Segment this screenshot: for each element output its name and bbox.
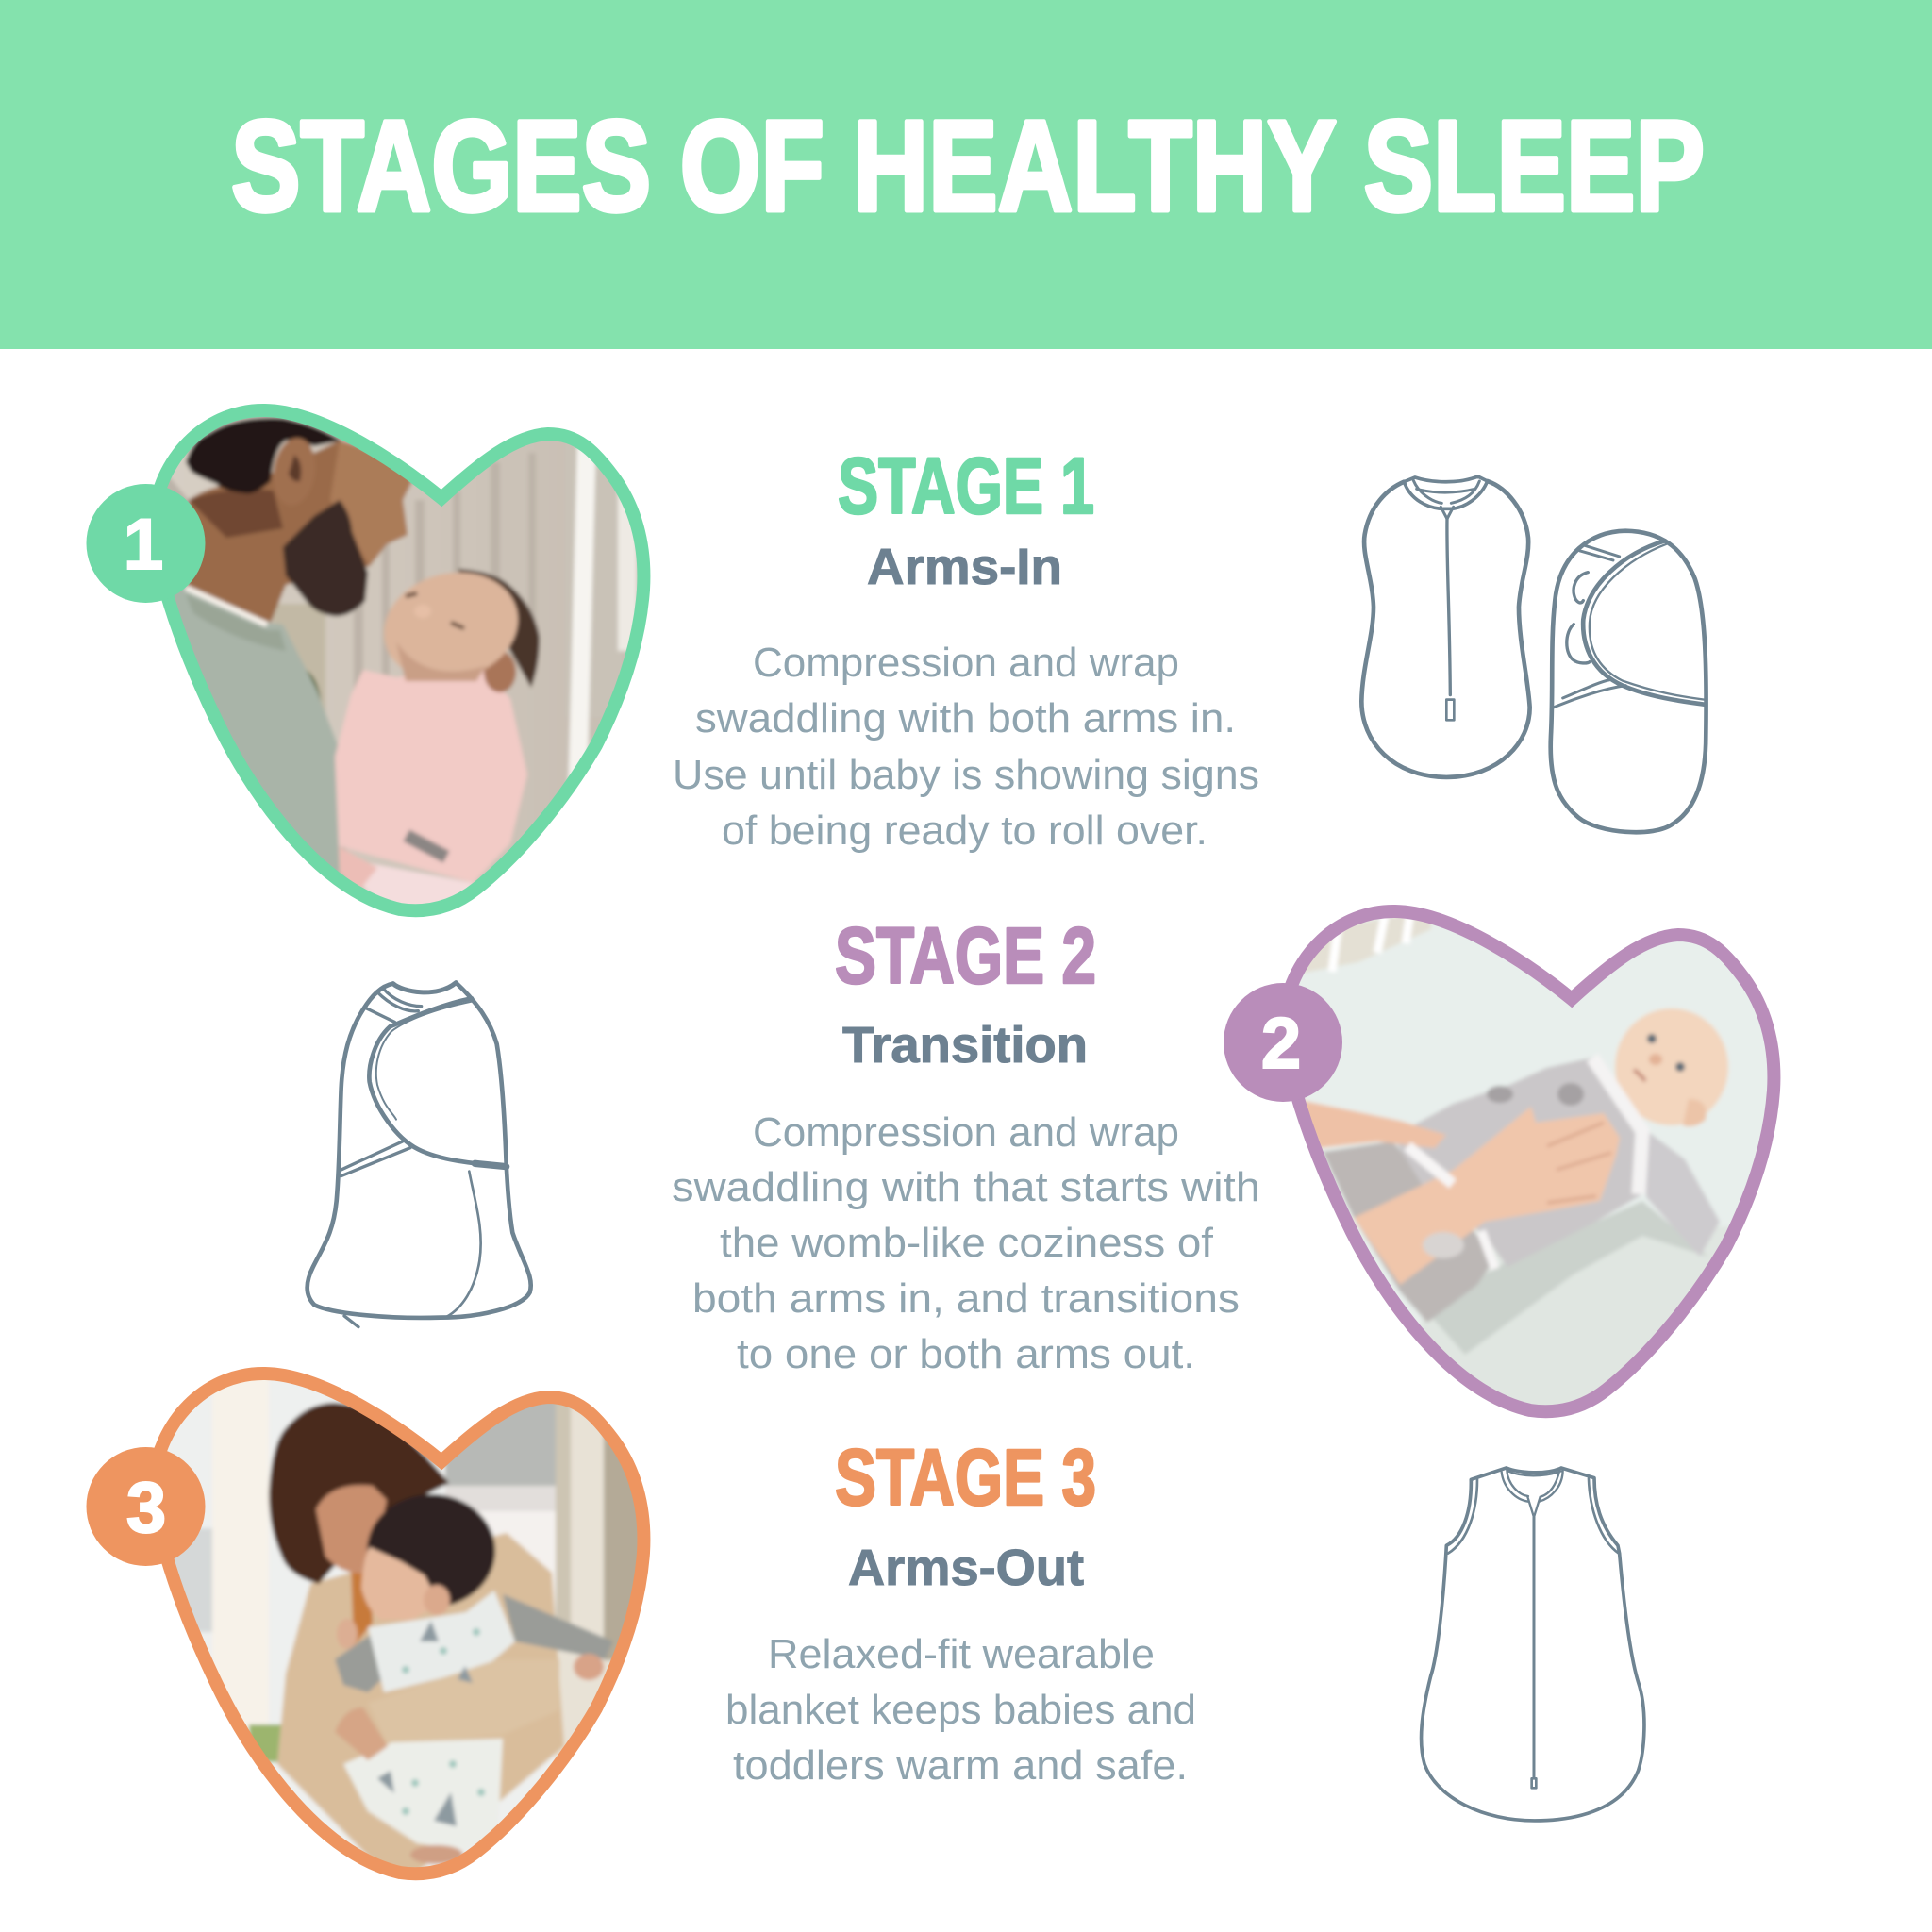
badge 2: [1224, 983, 1342, 1102]
stage 2 description: [672, 1109, 1260, 1377]
stage 2 description: both arms in, and transitions: [692, 1275, 1240, 1322]
icon: wrap swaddle pod: [1551, 531, 1707, 832]
stage 2 subheading: Transition: [842, 1017, 1088, 1074]
stage 3 heading: STAGE 3: [835, 1433, 1096, 1522]
badge 3: 3: [126, 1468, 166, 1548]
stage 2 description: Compression and wrap: [753, 1109, 1179, 1156]
badge 1: 1: [124, 505, 163, 585]
stage 2 description: to one or both arms out.: [737, 1331, 1195, 1377]
icon: stage 3 sleep sack: [1422, 1468, 1644, 1821]
stage 1 description: swaddling with both arms in.: [695, 695, 1236, 741]
stage 1 description: of being ready to roll over.: [722, 808, 1208, 854]
heart outline purple: [1284, 911, 1774, 1411]
panel: stage 3 heart photo: [87, 1358, 660, 1887]
badge 1: [87, 484, 206, 603]
heart outline orange: [154, 1374, 643, 1874]
badge 3: [87, 1447, 206, 1566]
header band: [0, 0, 1932, 349]
stage 1 description: [673, 640, 1259, 854]
photo: woman hugging baby in sleep sack: [168, 1380, 638, 1868]
stage 1 heading: STAGE 1: [838, 441, 1094, 530]
panel: stage 1 heart photo: [87, 396, 660, 924]
stage 2 description: swaddling with that starts with: [672, 1164, 1260, 1210]
stage 3 subheading: Arms-Out: [848, 1540, 1084, 1596]
stage 1 subheading: Arms-In: [867, 539, 1062, 595]
stage 3 description: [725, 1631, 1196, 1789]
stage 3 description: Relaxed-fit wearable: [768, 1631, 1155, 1677]
icon: zip swaddle pod: [1361, 476, 1530, 777]
stage 1 description: Compression and wrap: [753, 640, 1179, 686]
stage 1 description: Use until baby is showing signs: [673, 752, 1259, 798]
icon: stage 2 transition swaddle: [308, 983, 531, 1327]
panel: stage 1 text: [673, 441, 1259, 854]
badge 2: 2: [1261, 1004, 1301, 1084]
heart outline green: [154, 410, 643, 910]
panel: stage 2 heart photo: [1224, 896, 1792, 1424]
panel: stage 3 text: [725, 1433, 1196, 1789]
stage 2 heading: STAGE 2: [835, 911, 1096, 1000]
photo: father holding swaddled baby: [167, 417, 638, 904]
stage 3 description: blanket keeps babies and: [725, 1687, 1196, 1733]
stage 3 description: toddlers warm and safe.: [733, 1742, 1188, 1789]
panel: stage 2 text: [672, 911, 1260, 1377]
stage 2 description: the womb-like coziness of: [720, 1220, 1214, 1266]
photo: baby being swaddled on crib mattress: [1298, 918, 1768, 1406]
icon: stage 1 swaddle garments: [1361, 476, 1707, 832]
